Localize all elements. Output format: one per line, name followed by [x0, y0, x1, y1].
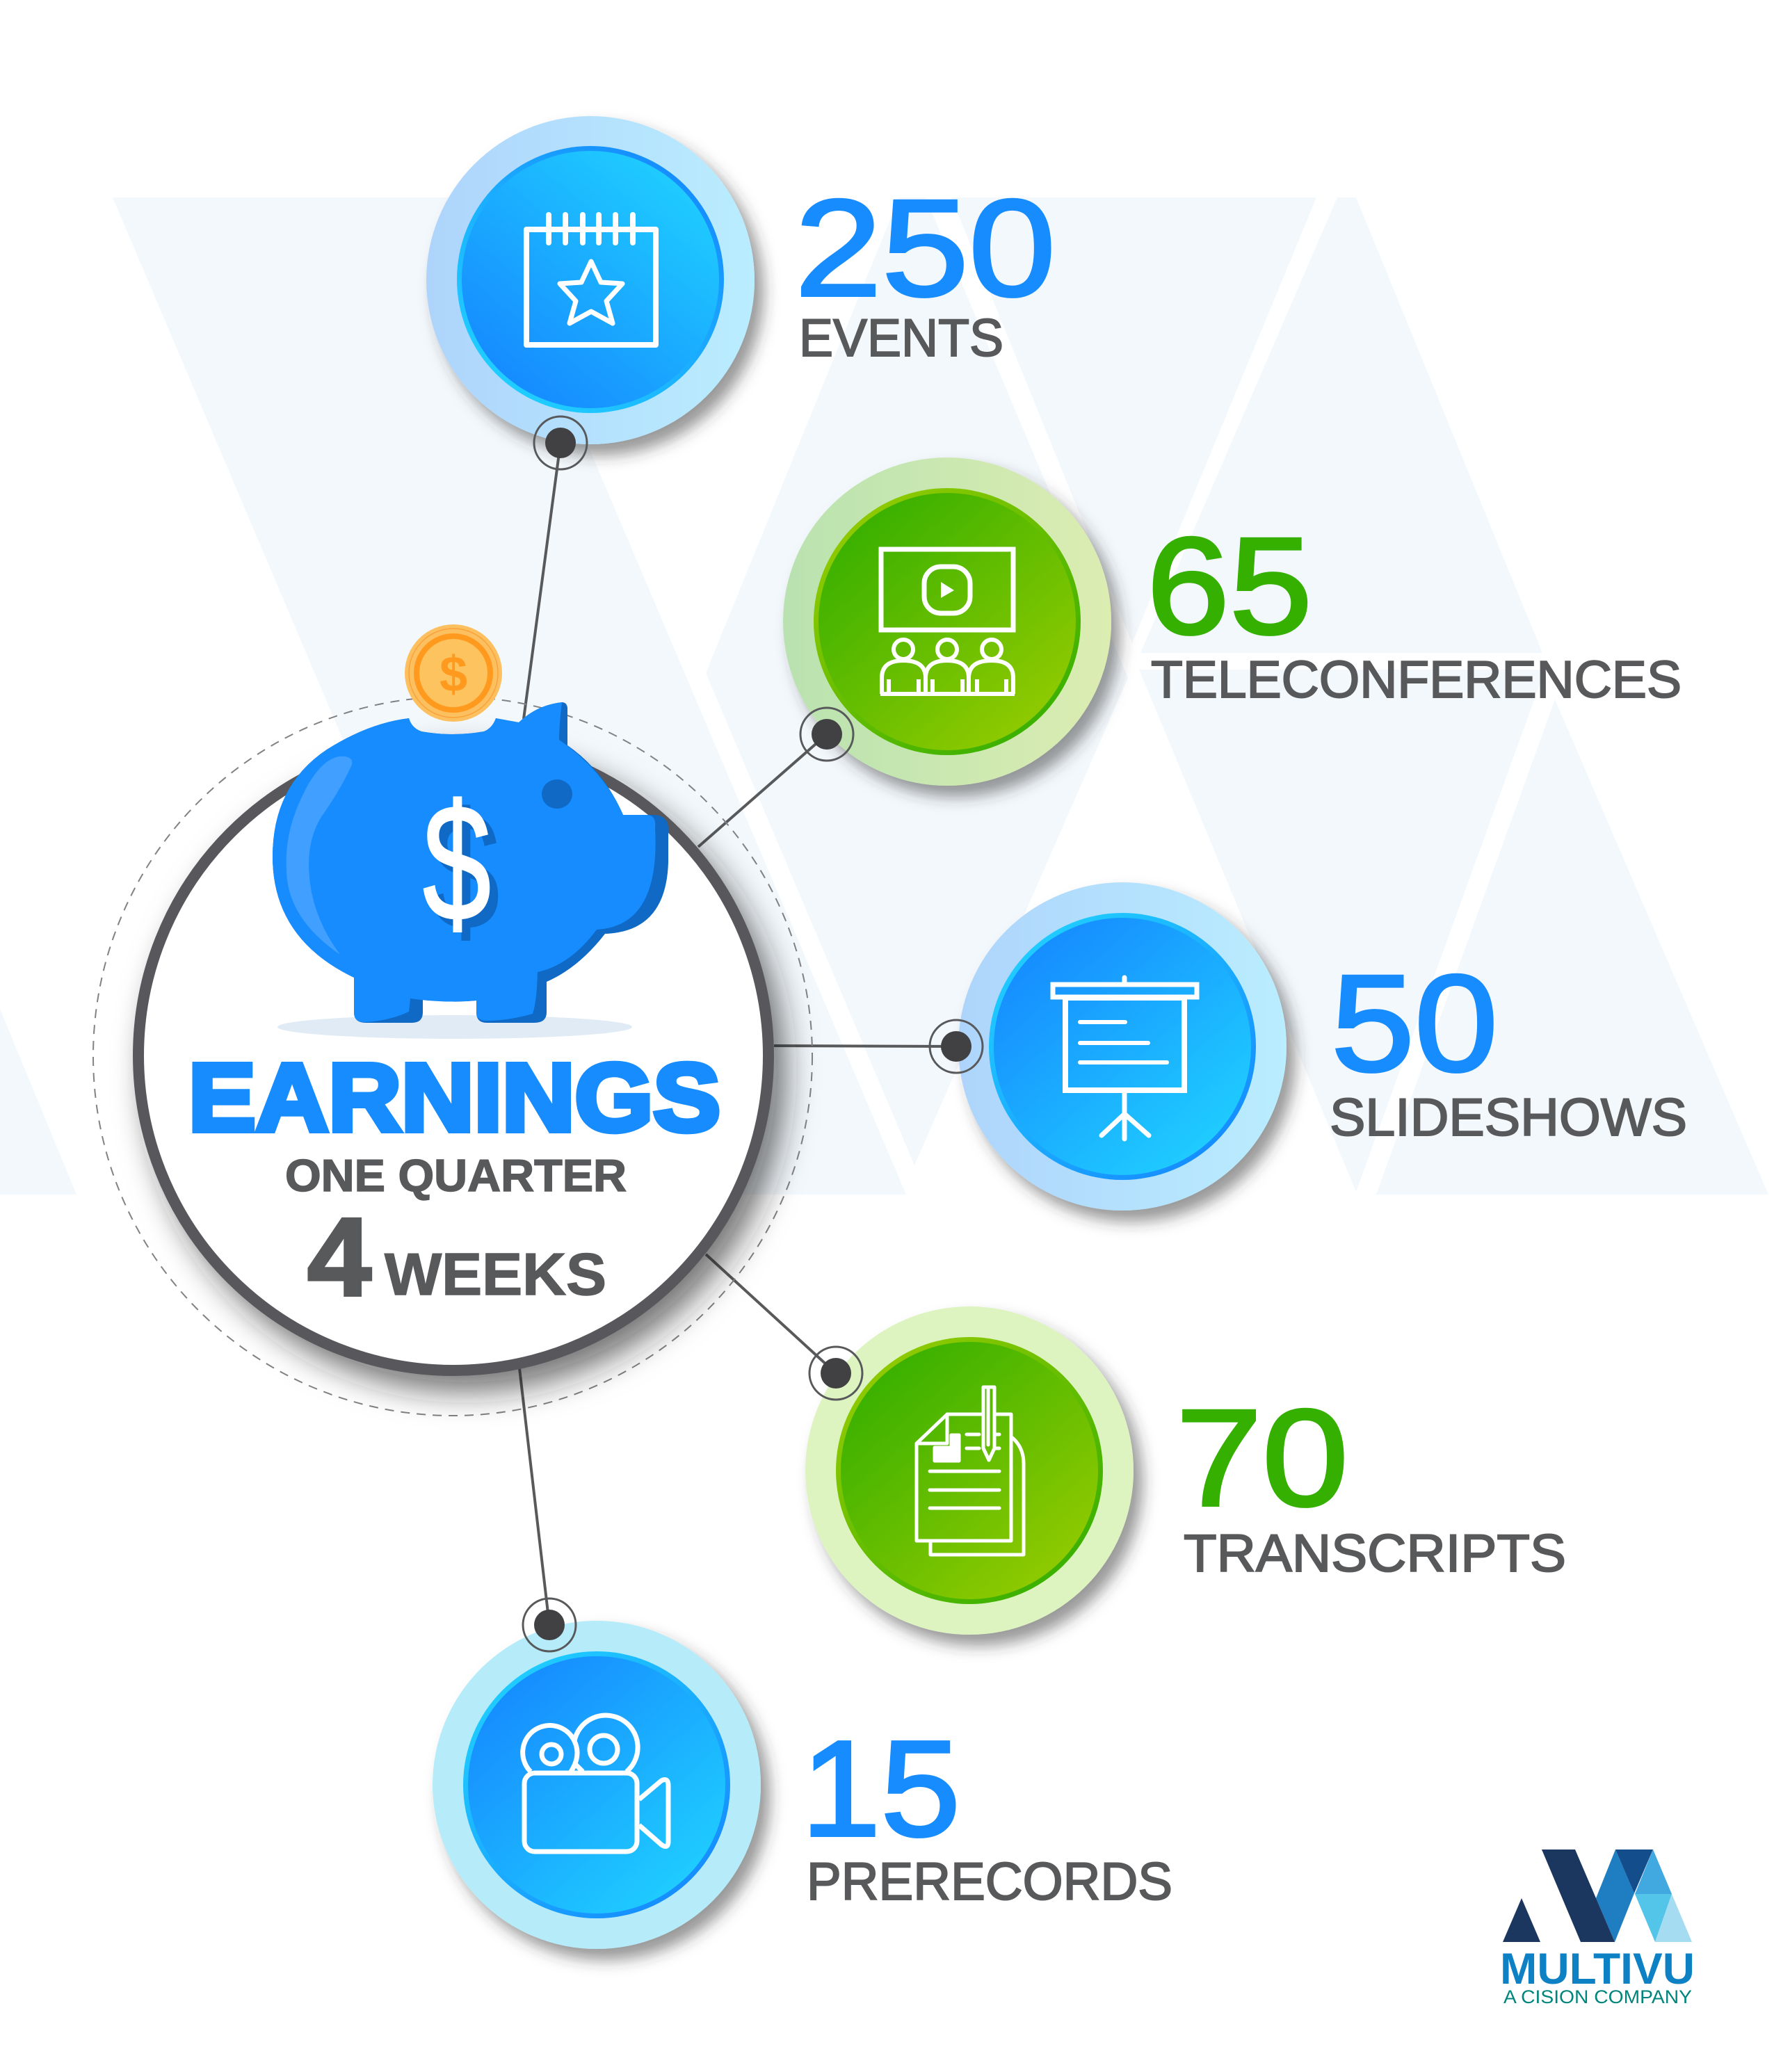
icon: calendar with star — [526, 215, 656, 345]
background watermark logo shapes — [0, 197, 1768, 1195]
pig body — [273, 702, 656, 1022]
icon: presentation screen — [1053, 978, 1197, 1139]
stat: 70 transcripts: 70 — [1176, 1381, 1348, 1535]
logo: Multivu: MULTIVU — [1500, 1945, 1695, 1993]
central circle — [138, 740, 768, 1370]
dollar sign: $ — [423, 770, 491, 955]
pig shadow — [277, 1015, 632, 1039]
pig eye — [542, 779, 572, 809]
logo: Multivu — [1500, 1850, 1695, 2007]
connector lines — [519, 443, 956, 1625]
subheading: 4 weeks: 4 — [307, 1195, 371, 1319]
icon: documents with pen — [917, 1387, 1024, 1555]
badge: events — [426, 116, 755, 444]
pig highlight — [287, 756, 352, 955]
stat: 50 slideshows: SLIDESHOWS — [1330, 1088, 1687, 1147]
stat: 65 teleconferences: TELECONFERENCES — [1151, 650, 1682, 709]
subheading: 4 weeks — [307, 1195, 606, 1319]
stat: 250 events — [795, 171, 1056, 368]
stat: 250 events: EVENTS — [799, 309, 1003, 368]
logo: Multivu: A CISION COMPANY — [1503, 1986, 1692, 2007]
stat: 15 prerecords — [801, 1713, 1172, 1911]
badge: prerecords — [433, 1621, 761, 1949]
subheading: one quarter: ONE QUARTER — [285, 1150, 627, 1201]
stat: 50 slideshows: 50 — [1331, 946, 1498, 1100]
icon: movie camera — [523, 1715, 668, 1852]
dot: slideshows — [930, 1020, 983, 1073]
badge: slideshows — [958, 882, 1287, 1211]
pig dark side — [273, 702, 668, 1023]
stat: 70 transcripts: TRANSCRIPTS — [1184, 1524, 1566, 1583]
dot: teleconferences — [800, 708, 853, 761]
dashed orbit circle — [93, 697, 812, 1416]
icon: screen and audience — [880, 549, 1015, 694]
connector dots — [523, 416, 983, 1651]
heading: earnings: EARNINGS — [188, 1044, 720, 1151]
stat: 65 teleconferences: 65 — [1147, 509, 1312, 663]
coin — [405, 624, 502, 722]
badge: teleconferences — [783, 458, 1111, 786]
stat: 65 teleconferences — [1147, 509, 1682, 709]
badge: transcripts — [805, 1306, 1134, 1635]
stat: 15 prerecords: PRERECORDS — [807, 1852, 1172, 1911]
piggy bank illustration — [273, 624, 668, 1039]
stat: 70 transcripts — [1176, 1381, 1566, 1583]
stat: 50 slideshows — [1330, 946, 1687, 1147]
dot: transcripts — [809, 1347, 862, 1400]
dollar sign shadow: $ — [431, 779, 499, 964]
dot: prerecords — [523, 1598, 576, 1651]
subheading: 4 weeks: WEEKS — [385, 1242, 606, 1308]
stat: 15 prerecords: 15 — [801, 1713, 960, 1865]
coin: $ — [440, 647, 467, 702]
stat: 250 events: 250 — [795, 171, 1056, 325]
dot: events — [534, 416, 587, 469]
